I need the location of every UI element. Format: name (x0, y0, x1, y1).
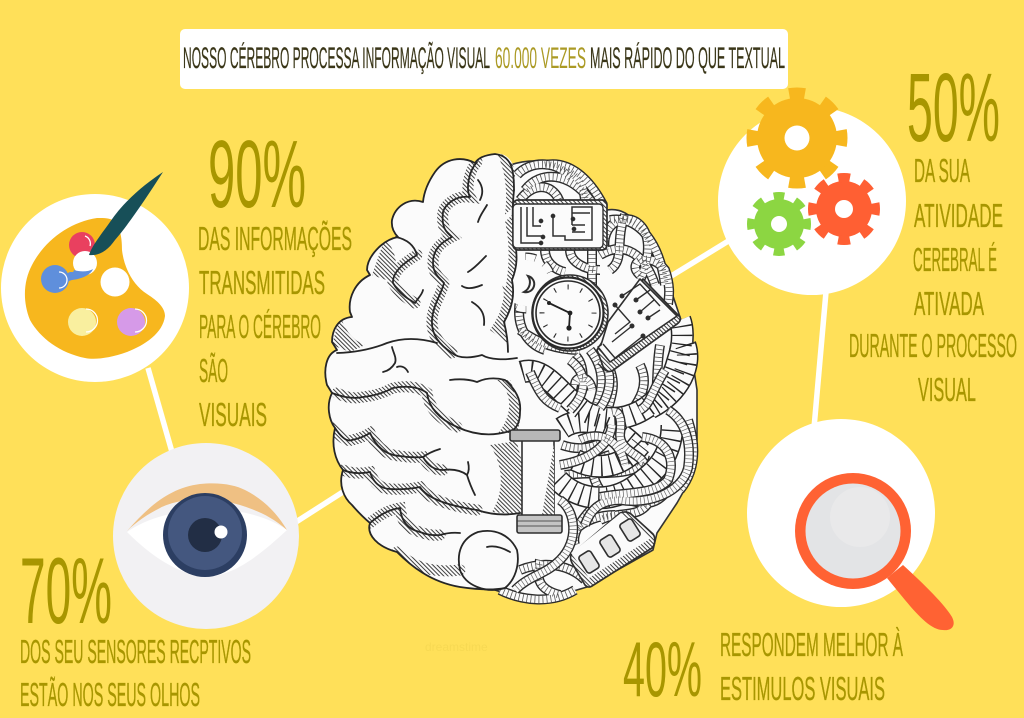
hatch bands (332, 153, 525, 515)
stat: 90%: SÃO (199, 352, 228, 389)
large orange gear (752, 93, 842, 183)
stat: 90%: 90% (208, 121, 306, 228)
title banner (180, 29, 788, 89)
red gear (812, 178, 876, 240)
title banner: 60.000 VEZES (495, 42, 586, 75)
small gear behind clock (500, 257, 552, 309)
tubes (500, 164, 693, 599)
stat: 70%: ESTÃO NOS SEUS OLHOS (20, 676, 200, 713)
switch box (571, 512, 655, 587)
stat: 50% (849, 53, 1017, 408)
scroll (510, 430, 562, 533)
watermark: dreamstime (425, 640, 488, 654)
stat: 70%: 70% (20, 538, 112, 643)
clock (532, 275, 608, 351)
stat: 90% (198, 121, 352, 433)
icon: gears (718, 93, 906, 295)
icon: magnifying glass (747, 419, 954, 630)
outline and fold lines (325, 154, 520, 590)
stat: 90%: TRANSMITIDAS (199, 264, 325, 301)
left hemisphere (325, 153, 525, 590)
fold hatching (333, 162, 477, 571)
icon: paint palette (1, 172, 189, 382)
stat: 40% (623, 625, 903, 713)
infographic canvas: DOS SEU SENSORES RECPTIVOS (20, 633, 251, 670)
icon: eye (113, 443, 299, 629)
title banner: NOSSO CÉREBRO PROCESSA INFORMAÇÃO VISUAL (183, 41, 490, 75)
green gear (751, 196, 807, 252)
stat: 70% (20, 538, 251, 713)
right hemisphere: machine base (495, 161, 697, 603)
stat: 40%: 40% (623, 625, 702, 713)
infographic canvas: DAS INFORMAÇÕES (198, 220, 352, 257)
chip card (597, 279, 680, 371)
stat: 90%: VISUAIS (199, 396, 267, 433)
circuit board (513, 200, 607, 250)
connector lines (148, 240, 826, 522)
stat: 90%: PARA O CÉREBRO (199, 308, 321, 345)
illustration: brain (325, 153, 697, 603)
